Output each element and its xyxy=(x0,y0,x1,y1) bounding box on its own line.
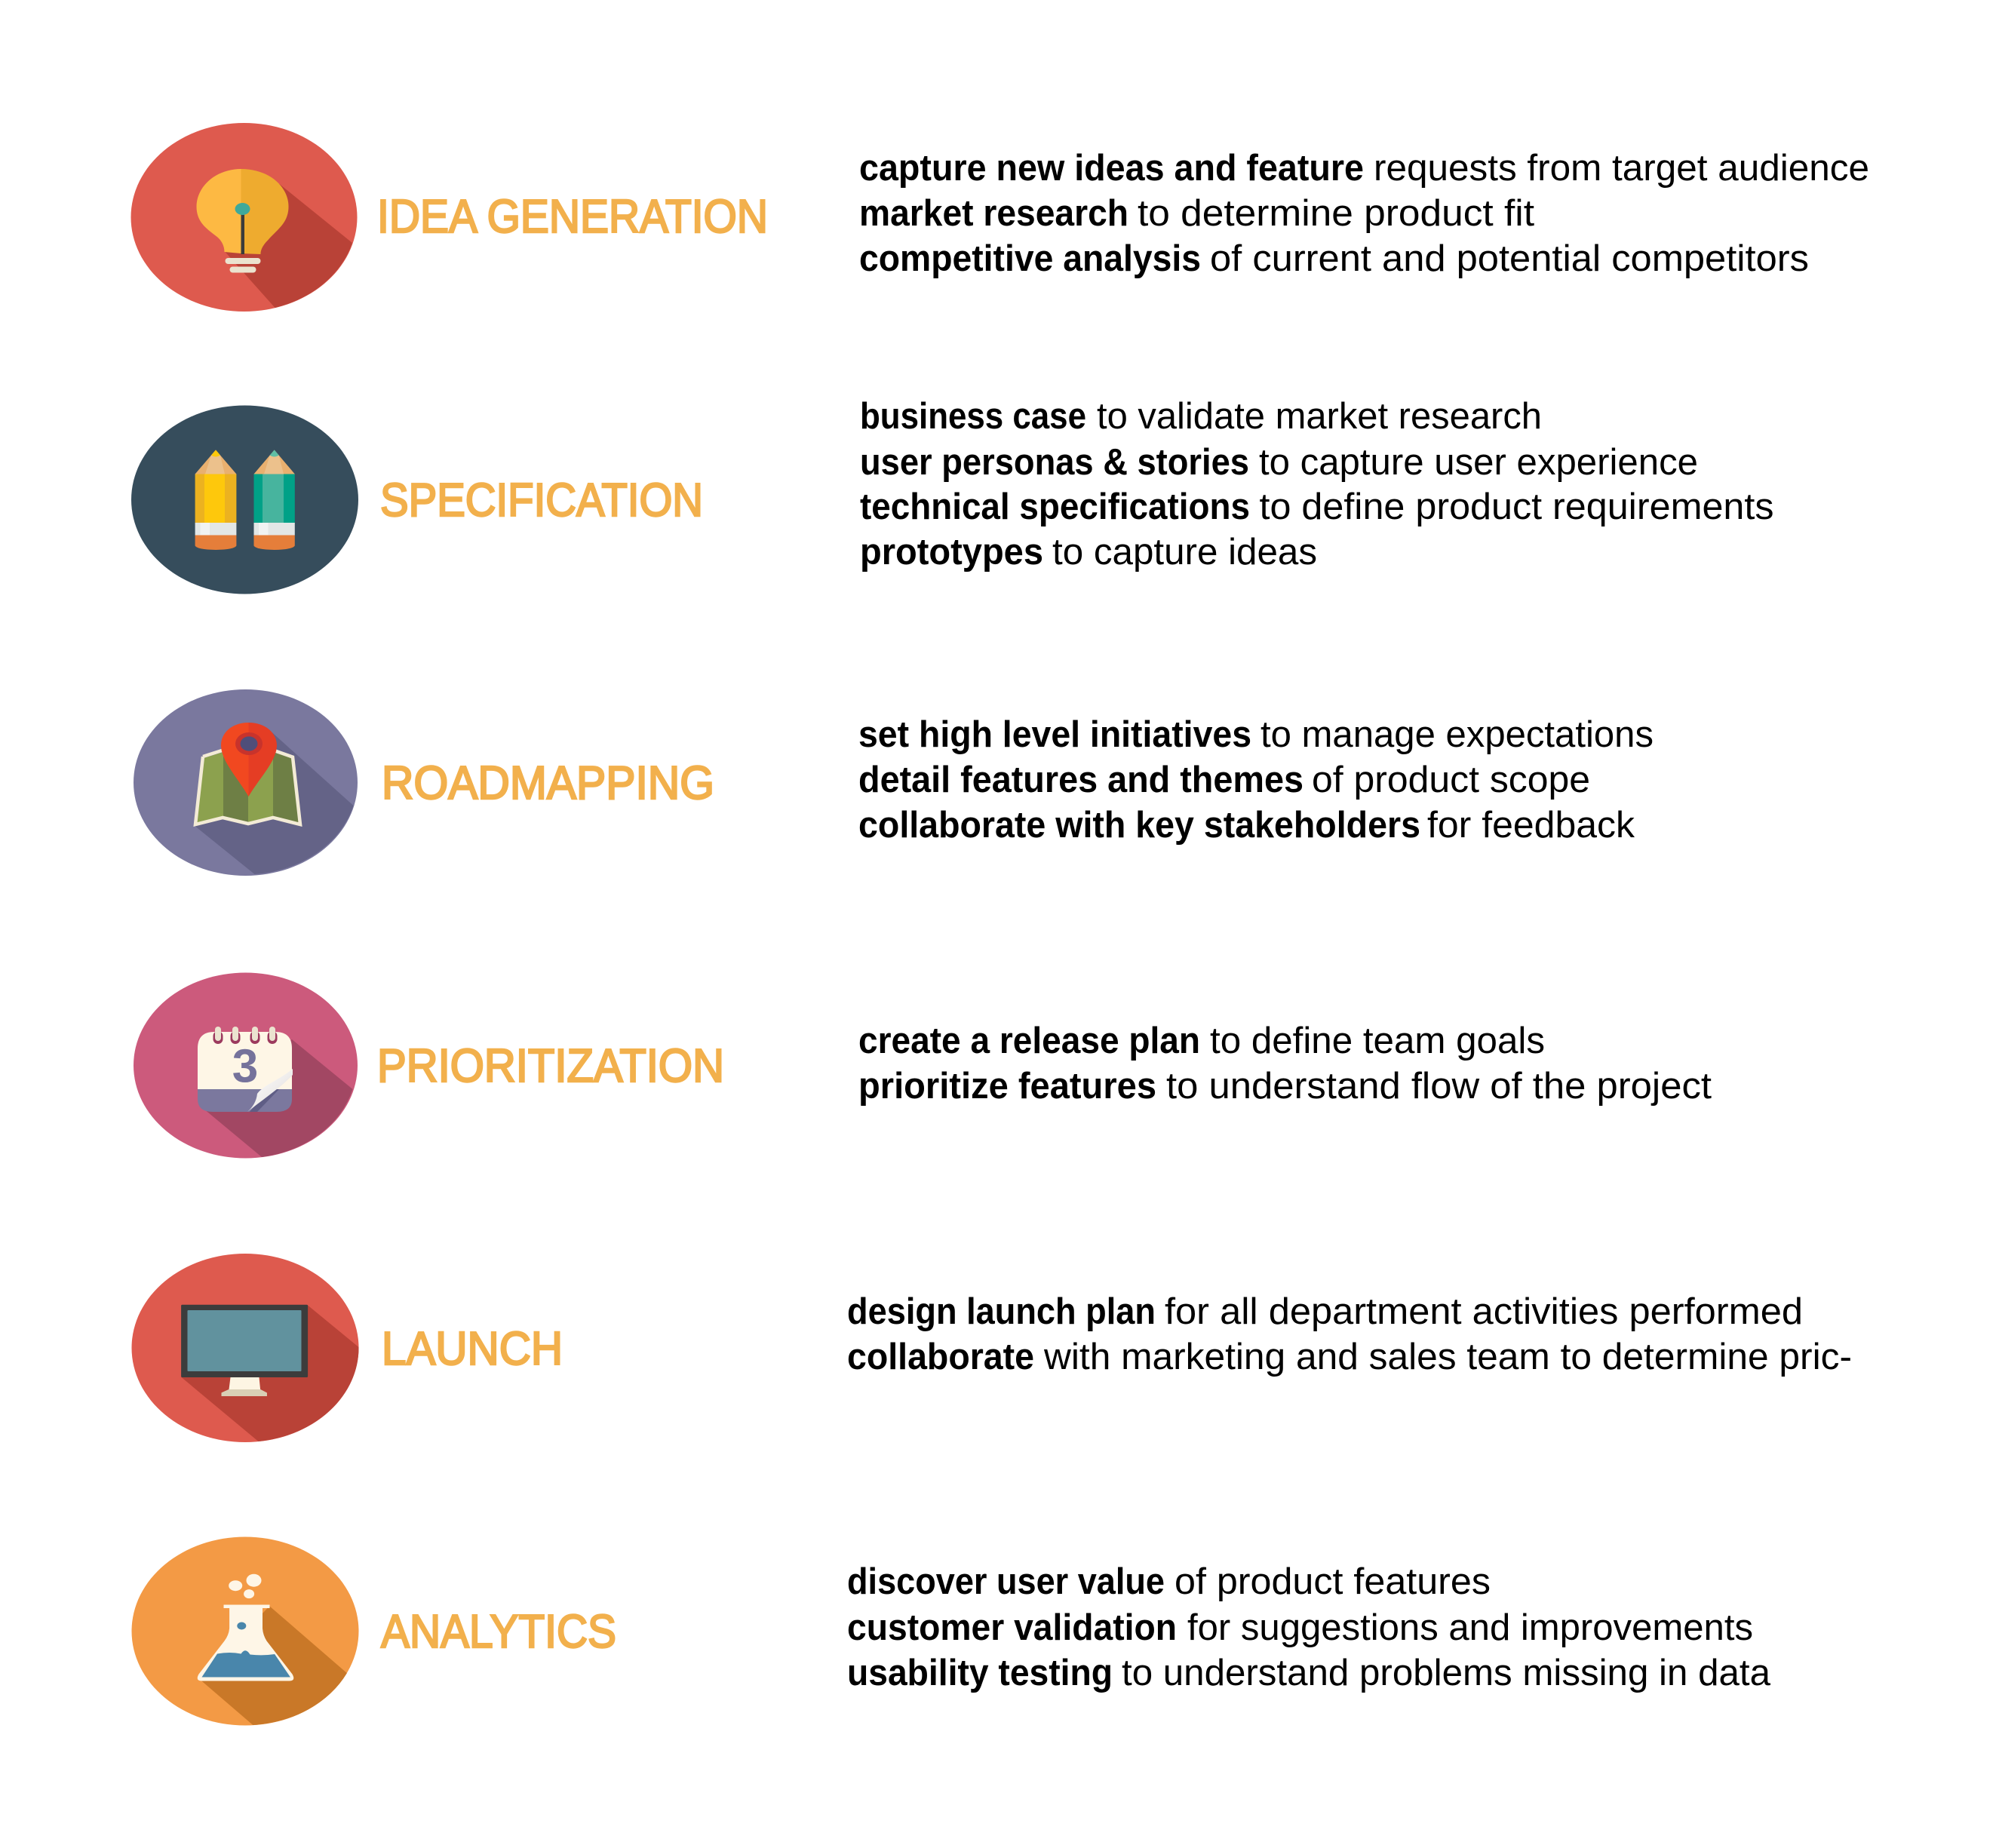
text block: specification details: to capture user experience xyxy=(1259,442,1698,483)
text block: launch details: collaborate xyxy=(847,1337,1034,1377)
row: launch xyxy=(131,1254,1852,1442)
text block: roadmapping details: set high level initiatives xyxy=(858,714,1251,755)
text block: launch details: for all department activities performed xyxy=(1165,1291,1803,1332)
row: roadmapping xyxy=(134,689,1654,876)
text block: specification details: user personas & stories xyxy=(860,442,1249,483)
text block: roadmapping details: collaborate with key stakeholders xyxy=(858,805,1420,846)
text block: analytics details xyxy=(847,1561,1771,1693)
text block: specification details: technical specifications xyxy=(860,487,1250,527)
text block: idea generation details xyxy=(859,148,1869,279)
row: prioritization xyxy=(134,973,1712,1159)
text block: analytics details: for suggestions and improvements xyxy=(1187,1607,1753,1648)
icon: flask xyxy=(131,1537,359,1726)
text block: roadmapping details: to manage expectations xyxy=(1261,714,1654,755)
icon: calendar xyxy=(134,973,358,1159)
row: idea generation xyxy=(131,123,1869,312)
icon: light bulb xyxy=(131,123,358,312)
text block: launch details xyxy=(847,1291,1852,1377)
row: specification xyxy=(131,396,1774,594)
text block: specification details: business case xyxy=(860,396,1086,437)
icon: map with location pin xyxy=(134,689,358,876)
text block: idea generation details: of current and potential competitors xyxy=(1210,238,1809,279)
text block: specification details: to capture ideas xyxy=(1052,532,1317,573)
text block: prioritization details xyxy=(858,1021,1712,1107)
text block: idea generation details: capture new ideas and feature xyxy=(859,148,1364,189)
text block: launch details: with marketing and sales team to determine pric- xyxy=(1043,1337,1852,1377)
text block: specification details: prototypes xyxy=(860,532,1043,573)
text block: analytics details: to understand problems missing in data xyxy=(1122,1653,1771,1693)
text block: specification details: to define product requirements xyxy=(1260,487,1774,527)
icon: pencils xyxy=(131,406,358,594)
text block: prioritization details: to define team goals xyxy=(1210,1021,1545,1061)
text block: idea generation details: requests from target audience xyxy=(1374,148,1869,189)
icon: monitor xyxy=(131,1254,359,1442)
text block: launch details: design launch plan xyxy=(847,1291,1156,1332)
text block: roadmapping details: detail features and themes xyxy=(858,760,1303,800)
text block: roadmapping details xyxy=(858,714,1654,846)
text block: analytics details: usability testing xyxy=(847,1653,1113,1693)
text block: idea generation details: market research xyxy=(859,193,1128,234)
text block: idea generation details: competitive analysis xyxy=(859,238,1201,279)
text block: prioritization details: to understand flow of the project xyxy=(1166,1066,1712,1107)
text block: specification details: to validate market research xyxy=(1097,396,1542,437)
text block: prioritization details: prioritize features xyxy=(858,1066,1156,1107)
heading: idea generation: IDEA GENERATION xyxy=(377,191,768,243)
text block: analytics details: discover user value xyxy=(847,1561,1165,1602)
text block: roadmapping details: for feedback xyxy=(1427,805,1635,846)
heading: analytics: ANALYTICS xyxy=(381,1606,616,1658)
icon: calendar: 3 xyxy=(232,1041,258,1092)
text block: roadmapping details: of product scope xyxy=(1312,760,1590,800)
heading: prioritization: PRIORITIZATION xyxy=(377,1040,724,1092)
text block: idea generation details: to determine product fit xyxy=(1138,193,1534,234)
text block: prioritization details: create a release plan xyxy=(858,1021,1200,1061)
heading: launch: LAUNCH xyxy=(382,1323,563,1375)
heading: specification: SPECIFICATION xyxy=(380,474,703,526)
heading: roadmapping: ROADMAPPING xyxy=(382,757,714,809)
text block: specification details xyxy=(860,396,1774,573)
text block: analytics details: customer validation xyxy=(847,1607,1177,1648)
text block: analytics details: of product features xyxy=(1175,1561,1491,1602)
row: analytics xyxy=(131,1537,1771,1726)
